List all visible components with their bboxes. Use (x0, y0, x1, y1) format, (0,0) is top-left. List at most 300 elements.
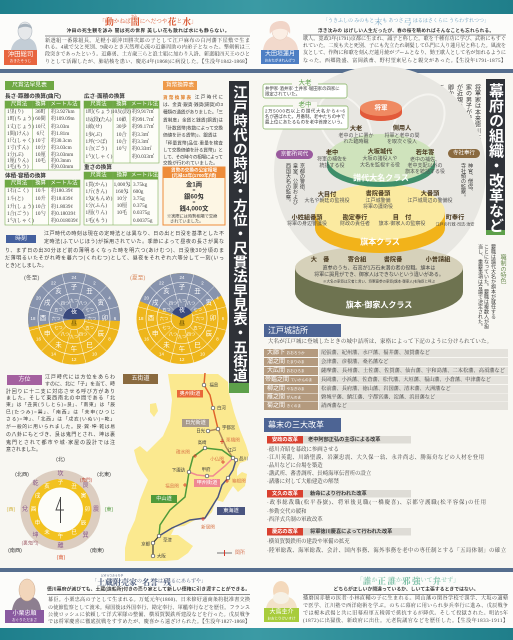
icon: portrait of 大鳥圭介 (264, 581, 299, 622)
callout: 老中: 老中 (298, 100, 312, 108)
chart: 方位盤: 寅 (81, 492, 87, 500)
map: 五街道: 栗橋関 (226, 436, 240, 444)
table: 広さ・面積の換算: 広さ·面積の換算 (84, 92, 125, 100)
chart: 夏至の時刻盤: 戌 (152, 298, 159, 306)
chart: 夏至の時刻盤: 申 (152, 328, 158, 338)
table: 広さ・面積の換算: 1坪(つぼ) (86, 137, 107, 145)
chart: 方位盤: (南東) (90, 546, 104, 554)
pill: 寺社奉行 (448, 148, 480, 158)
tier: 譜代大名クラス: 大名を監視する役 (360, 162, 400, 168)
chart: 夏至の時刻盤: 六つ (160, 315, 168, 322)
ruby: どぞうつきうりや: どぞうつきうりや (101, 574, 123, 578)
text block: 将軍家の説明: が近親の御三家、御三 (456, 83, 463, 146)
chart: 夏至の時刻盤: 辰 (206, 330, 213, 338)
table: 重さの換算: 尺貫法 (90, 171, 107, 179)
chart: 方位盤: (西) (7, 506, 16, 513)
role: 側用人: を取次ぐ役人 (387, 138, 417, 145)
chart: 冬至の時刻盤: 八つ (79, 300, 87, 306)
table: 重さの換算: 0.00375g (133, 218, 153, 224)
chart: 冬至の時刻盤: 10 (92, 352, 97, 356)
biography text: 歌人。寛政3年(1791)京都に生まれ、誠子と称した。歌を千種有功に学び、武術にもすぐ (303, 35, 506, 42)
table: 重さの換算: 換算 (117, 171, 128, 179)
reform: 文久の改革: 勅命により行われた改革 (310, 489, 367, 497)
text block: 方位の説明 (6, 374, 115, 453)
chart: 方位盤: 乾 (32, 479, 39, 487)
callout: 大老: 井伊家·酒井家·土井家·堀田家の四家に (265, 85, 340, 92)
label: 日光街道: 日光街道 (185, 418, 206, 426)
chart: 冬至の時刻盤: 辰 (98, 330, 105, 338)
text block: 貨幣換算の説明: 種類の通貨がありました。「三 (163, 108, 223, 116)
table: 体積・容積の換算: 約0.18039ℓ (51, 209, 76, 217)
table: 広さ・面積の換算: 1合(ごう) (86, 144, 107, 152)
text block: 方位の説明: 鬼門とされて都市や城·家屋の設計では注 (6, 439, 115, 446)
icon: portrait of 大鳥圭介: おおとりけいすけ (268, 616, 296, 620)
chart: 夏至の時刻盤: 四つ (169, 300, 177, 305)
table: 重さの換算: 1毛(もう) (86, 216, 107, 224)
text block: 貨幣換算の説明: して交換価値を計る貨幣)」と (163, 146, 223, 154)
table: 長さ・距離の換算: 約3.927km (51, 107, 74, 115)
role: 大老: 大老 (350, 124, 362, 132)
chart: 方位盤: 午 (58, 532, 64, 540)
tier: 旗本・御家人クラス (295, 246, 463, 318)
heading: 幕末の三大改革: 幕末の三大改革 (268, 420, 324, 430)
chart: 夏至の時刻盤: 午 (179, 344, 186, 353)
table: 体積・容積の換算: 1合(ごう) (7, 209, 29, 217)
table: 広さ・面積の換算: 約0.33㎡ (132, 144, 152, 152)
tier: 旗本クラス: 江戸城警備 (365, 197, 391, 204)
callout: 公定相場: (元禄13年(1700年)頃) (172, 172, 217, 179)
chart: 冬至の時刻盤: 七つ (54, 324, 63, 330)
chart: 冬至の時刻盤: 七つ (85, 306, 94, 312)
chart: 冬至の時刻盤: 20 (36, 296, 41, 300)
chart: 冬至の時刻盤: 巳 (86, 341, 93, 349)
table: 長さ・距離の換算: 尺貫法 (11, 100, 28, 108)
table: 重さの換算: 1,000匁 (114, 180, 131, 188)
icon: portrait of 小栗忠順: 小栗忠順 (12, 609, 37, 617)
chart: 夏至の時刻盤: 12 (180, 357, 185, 362)
text block: 方位の説明: 意されました。 (6, 446, 41, 453)
chart: 冬至の時刻盤: 酉 (40, 314, 47, 322)
chart: 夏至の時刻盤: 六つ (196, 315, 204, 322)
callout: 老中: 最上位にあたるものを老中首座という。 (265, 118, 345, 126)
table: 重さの換算: 160匁 (116, 187, 129, 195)
header panel: 沖田総司 (4, 14, 250, 65)
table: 重さの換算: 600g (133, 189, 144, 195)
table: 長さ・距離の換算: 1厘(りん) (7, 156, 29, 164)
road: 京都大阪 (153, 536, 159, 556)
chart: 方位盤: (鬼門) (80, 476, 93, 484)
reform: 安政の改革: 老中阿部正弘の主導による改革 (308, 435, 380, 443)
tier: 旗本・御家人クラス: 将軍に謁見ができ、御家人はできないという違いがある。 (314, 271, 444, 278)
table: 長さ・距離の換算: 約1.81m (51, 129, 69, 137)
chart: 冬至の時刻盤: 九つ (70, 297, 78, 304)
map: 五街道: 下諏訪 (172, 466, 186, 474)
table: 長さ・距離の換算: 1町(ちょう) (7, 114, 34, 122)
role: 大老 (338, 124, 374, 145)
map: 五街道 (125, 373, 249, 561)
table: 広さ・面積の換算: 1畝(せ) (86, 122, 102, 130)
table: 長さ・距離の換算: 10毛 (35, 156, 46, 164)
reform: 安政の改革: ·徳川斉昭を幕政に参画させる (267, 445, 339, 453)
callout: 大老: 大老 (298, 78, 312, 86)
reform: 安政の改革: ·講武所、蕃書調所、長崎海軍伝習所の設立 (267, 469, 372, 477)
chart: 冬至の時刻盤: 未 (55, 340, 62, 349)
quote translation: 徳川幕府が滅びても、土蔵(造船所)付きの売り家として新しい徳権に引き渡すことができる。 (47, 586, 250, 592)
table: 広さ・面積の換算 (84, 92, 159, 163)
text block: 貨幣換算の説明: 交換が行われていました。 (163, 160, 218, 166)
table: 広さ・面積の換算: 30歩 (116, 122, 127, 130)
biography text: りとして活躍したが、肺結核を患い、慶応4年(1868)に病没した。【生没年1842-1868】 (45, 58, 250, 65)
table: 重さの換算: 10厘 (117, 201, 128, 209)
callout: 老中: 名が選ばれた。月番制。老中たちの中で (265, 113, 346, 120)
table: 広さ・面積の換算: 約991.7㎡ (132, 115, 155, 123)
table: 長さ・距離の換算: 約3.03m (51, 122, 69, 130)
section button: 方位: 方位 (18, 375, 31, 383)
table: 広さ・面積の換算: 約9,917㎡ (132, 107, 155, 115)
quote translation: 浮き沈みの はげしい人生だったが、春の桜を眺めればそんなことも忘れられる。 (318, 27, 494, 34)
chart: 冬至の時刻盤: 九つ (70, 333, 78, 340)
reform: 安政の改革: 安政の改革 (272, 435, 298, 443)
chart: 方位盤: 巽 (82, 532, 89, 539)
label: 東海道 (217, 506, 245, 515)
chart: 方位盤: 震 (93, 506, 99, 513)
chart: 方位盤: (南西) (8, 546, 22, 554)
text block: 職制の特色 (477, 243, 506, 329)
header panel: 大田垣蓮月 (261, 16, 506, 64)
table: 体積・容積の換算: 換算 (35, 179, 46, 187)
map: 五街道: 福島関 (165, 482, 179, 490)
chart: 冬至の時刻盤: 24 (72, 275, 77, 280)
vertical title: 幕府の組織・改革など: 幕府の組織・改革など (487, 83, 504, 233)
chart: 冬至の時刻盤: 六つ (88, 315, 96, 322)
table: 広さ・面積の換算: 10合 (116, 137, 127, 145)
section button: 尺貫法早見表: 尺貫法早見表 (12, 80, 47, 88)
table: 体積・容積の換算: 10勺 (35, 209, 46, 217)
tier: 譜代大名クラス: 老中 (326, 148, 338, 156)
tier: 譜代大名クラス: 老中支配以外の (407, 162, 443, 169)
reform: 慶応の改革: ·横須賀製鉄所の建設や軍備の拡充 (267, 537, 350, 545)
text block: 貨幣換算の説明: 貨制度」金貨と銭貨(銅貨)は (163, 116, 223, 124)
chart: 冬至の時刻盤: 夜 (71, 308, 77, 316)
table: 体積・容積の換算: 10合 (35, 202, 46, 210)
reform: 慶応の改革: 将軍徳川慶喜によって行われた改革 (310, 527, 392, 535)
callout: 公定相場: 金1両 (186, 180, 203, 188)
quote translation: 沖田の死生観を詠み 闇は死の世界 美しい花も散れば水にも静らない。 (66, 27, 230, 34)
tier: 譜代大名クラス (317, 134, 445, 187)
table: 体積・容積の換算: 1斗(と) (7, 194, 24, 202)
reform: 文久の改革: ·政事総裁職(松平春嶽)、将軍後見職(一橋慶喜)、京都守護職(松平容保)の任用 (267, 498, 486, 506)
chart: 方位盤: 卯 (85, 505, 91, 513)
tier: 旗本クラス: 大名や朝廷の監視役 (304, 197, 350, 204)
table: 長さ・距離の換算: 換算 (35, 100, 46, 108)
table: 江戸城詰所: 尾張藩、紀州藩、水戸藩、福井藩、加賀藩など (321, 348, 430, 356)
chart: 夏至の時刻盤: 10 (200, 352, 205, 356)
callout: 公定相場: 銀60匁 (184, 192, 205, 200)
role: 大老: 老中の上に置か (338, 132, 374, 139)
biography text: (1872)に出獄後、新政府に出仕。元老院議官などを歴任した。【生没年1833-1911】 (303, 617, 508, 624)
quote heading: 「うきふしの みのもと末も あつさ弓 はるはさくらに うちわすれつつ」 (323, 16, 489, 26)
role: 側用人: 側用人 (393, 124, 412, 132)
reform: 安政の改革 (267, 435, 484, 485)
tier: 旗本クラス: 大目付 (318, 190, 336, 198)
text block: 職制の特色: 当し、重要事項は合議で決定された。 (477, 243, 483, 329)
chart: 夏至の時刻盤: 寅 (206, 298, 213, 306)
label: 奥州街道: 奥州街道 (180, 389, 200, 397)
table: 江戸城詰所: 柳之間 やなぎのま (267, 384, 305, 392)
tier: 譜代大名クラス: 大坂の諸役人や (362, 155, 398, 162)
map: 五街道: 江戸 (228, 446, 237, 454)
table: 長さ・距離の換算: 1寸(すん) (7, 143, 29, 151)
text block: 貨幣換算の説明: は、金貨·銀貨·銭貨(銅貨)の3 (163, 101, 223, 108)
biography text: れていた。二度も夫と死別、子にも先立たれ剃髪して仏門に入り蓮月尼と称した。風流を (303, 42, 506, 49)
text block: 方位の説明: 巳(たつみ)=巽」、「南西」は「未申(ひつじ (6, 408, 115, 416)
table: 江戸城詰所: 溜之間 たまりのま (267, 357, 305, 365)
text block: 貨幣換算の説明 (163, 94, 223, 166)
biography text: 播磨国赤穂の医者·小林直輔の子に生まれる。岡山藩の閑谷学校で漢学、大坂の適塾 (303, 594, 508, 602)
chart: 夏至の時刻盤: 4 (216, 296, 219, 300)
table: 体積・容積の換算: 10斗 (35, 186, 46, 194)
table: 江戸城詰所: 大廊下 おおろうか (267, 348, 305, 356)
tier: 譜代大名クラス: 若年寄 (416, 148, 434, 156)
chart: 方位盤: 酉 (31, 506, 37, 513)
map: 五街道: 白河 (217, 404, 226, 412)
text block: 時刻の説明: だ薄明るいたそがれ時を暮六つ(くれむつ)として、昼夜をそれぞれ六等分して一刻(いっ (5, 254, 224, 262)
icon: portrait of 沖田総司: おきたそうじ (10, 58, 32, 63)
text block: 時刻の説明: 定時法(ふていじほう)が採用されていた。季節によって昼夜の長さが異な (44, 238, 224, 245)
chart: 方位盤: 未 (44, 528, 50, 536)
tier: 旗本クラス: 江戸の行政·司法·治安 (436, 220, 474, 226)
tier: 旗本クラス: 旗本クラス (360, 236, 400, 246)
map: 五街道: 甲府 (202, 467, 211, 473)
org chart: 幕府の組織 (274, 66, 486, 318)
table: 江戸城詰所: 薩摩藩、長州藩、土佐藩、佐賀藩、仙台藩、宇和島藩、二本松藩、高須藩など (321, 366, 505, 374)
chart: 夏至の時刻盤: 巳 (194, 341, 201, 349)
table: 広さ・面積の換算: 10勺 (116, 144, 127, 152)
text block: 方位の説明: 東」は「丑寅(うしとら)=艮」、「南東」は「辰 (6, 401, 115, 408)
land mass (125, 374, 249, 561)
road: 甲州街道 (189, 458, 233, 476)
map: 五街道: 新居関 (201, 524, 215, 530)
chart: 冬至の時刻盤: 八つ (61, 332, 69, 338)
label: 日光街道 (182, 418, 209, 427)
chart: 冬至の時刻盤: 寅 (98, 298, 105, 306)
text block: 詰所の説明: 大名が江戸城に登城したときの城中詰所は、家格によって下記のように分けられていた。 (268, 337, 492, 345)
chart: 方位盤: 坤 (32, 531, 39, 539)
callout: 老中 (263, 100, 348, 129)
chart: 冬至の時刻盤: 子 (71, 283, 78, 291)
quote heading: 「動かねば闇にへだつや花と水」 (99, 16, 197, 27)
table: 長さ・距離の換算: 1分(ぶ) (7, 150, 24, 158)
text block: 方位の説明: ました。そして東西南北の中間である「北 (6, 394, 115, 402)
text block: 寺社奉行の説明 (460, 162, 473, 199)
map: 五街道: 福島 (210, 382, 219, 388)
tier: 旗本・御家人クラス: 大 番 (311, 256, 330, 264)
chart: 方位盤: 離 (57, 542, 64, 550)
label: 中山道 (151, 494, 177, 503)
quote heading: 「誰か正 誰か邪 強いて弁せず」 (357, 576, 459, 586)
chart: 冬至の時刻盤: 14 (51, 352, 56, 356)
chart: 夏至の時刻盤: 酉 (148, 314, 155, 322)
legend: 関所 (217, 549, 245, 556)
chart: 夏至の時刻盤: 20 (144, 296, 149, 300)
chart: 夏至の時刻盤: 五つ (162, 307, 171, 312)
text block: 貨幣換算の説明: して、その時々の相場によって (163, 154, 223, 160)
tier: 譜代大名クラス: 旗本を統括する役 (405, 168, 445, 175)
reform: 慶応の改革: ·陸軍総裁、海軍総裁、会計、国内事務、海外事務を老中の専任制とする「五局体制」の確立 (267, 546, 507, 554)
map: 五街道: 京都 (141, 542, 151, 548)
tier: 旗本クラス: 勘定奉行 (343, 214, 367, 222)
tier: 旗本・御家人クラス: ※大名の家臣は又者と言い、将軍直参の家臣(旗本·御家人)を陪臣と呼ぶ (323, 278, 435, 284)
icon: portrait of 大田垣蓮月: 大田垣蓮月 (265, 50, 295, 58)
chart: 方位盤: 亥 (44, 483, 50, 490)
table: 長さ・距離の換算: 約0.3mm (51, 156, 71, 164)
text block: 時刻の説明 (5, 230, 224, 269)
map: 五街道: 大阪 (157, 552, 166, 560)
chart: 夏至の時刻盤: 8 (216, 336, 219, 342)
chart: 夏至の時刻盤: 五つ (193, 325, 202, 330)
chart: 夏至の時刻盤: 七つ (193, 306, 202, 312)
callout: 老中: 2万5000石以上の譜代大名から4~6 (265, 108, 346, 114)
text block: 時刻の説明: 江戸時代の時刻は現在の定時法とは異なり、日の出と日没を基準とした不 (44, 230, 224, 237)
role: 側用人: 将軍と老中の間 (384, 132, 420, 139)
table: 長さ・距離の換算: 約0.03mm (51, 162, 73, 170)
table: 江戸城詰所: 松前藩、長府藩、徳山藩、岩国藩、清末藩、大洲藩など (321, 384, 451, 392)
chart: 冬至の時刻盤: 五つ (54, 307, 63, 312)
chart: 方位盤: 丑 (71, 483, 77, 490)
chart: 冬至の時刻盤: 16 (36, 336, 41, 342)
text block: 方位の説明: の八卦にもとづき、艮は鬼門とされ、坤は裏 (6, 431, 115, 438)
text block: 職制の特色: ことになっていた。要職は複数人が担 (483, 244, 489, 329)
table: 広さ・面積の換算: メートル法 (131, 100, 159, 108)
chart: 夏至の時刻盤: 2 (201, 280, 204, 286)
chart: 夏至の時刻盤: 九つ (178, 333, 186, 340)
table: 体積・容積の換算: 約18.039ℓ (51, 194, 73, 202)
chart: 夏至の時刻盤 (130, 273, 228, 364)
tier: 旗本・御家人クラス: 旗本·御家人クラス (346, 300, 412, 310)
table: 重さの換算: 1分(ふん) (86, 201, 107, 209)
icon: portrait of 小栗忠順: おぐりただまさ (12, 617, 37, 622)
table: 重さの換算: 重さの換算 (84, 163, 112, 171)
chart: 夏至の時刻盤: 18 (139, 316, 144, 321)
map: 五街道: 高崎 (198, 439, 207, 446)
table: 重さの換算: 1斤(きん) (86, 187, 107, 195)
tier: 旗本・御家人クラス: 直参のうち、石高が1万石未満の者の役職。旗本は (323, 264, 435, 272)
table: 体積・容積の換算: 1升(しょう) (7, 202, 34, 210)
table: 広さ・面積の換算: 1勺(しゃく) (86, 152, 113, 160)
table: 体積・容積の換算: メートル法 (51, 179, 78, 187)
table: 江戸城詰所: 会津藩、彦根藩、桑名藩など (321, 357, 388, 365)
chart: 冬至の時刻盤: 8 (108, 336, 111, 342)
table: 江戸城詰所: 磐城平藩、鯖江藩、宇都宮藩、淀藩、浜田藩など (321, 392, 435, 400)
text block: 方位の説明: 計回りに十二支に対応させる呼び方があり (6, 388, 115, 395)
table: 長さ・距離の換算: 36町 (35, 107, 46, 115)
biography text: では将軍慶喜に徹底抗戦をすすめたが、慶喜から遠ざけられた。【生没年1827-1868】 (48, 618, 250, 625)
table: 体積・容積の換算: 約1.8039ℓ (51, 202, 73, 210)
quote translation: どちらが正しいか間違っているか、しいて主張するときではない。 (334, 586, 478, 592)
table: 広さ・面積の換算: 1町(ちょう) (86, 107, 113, 115)
ruby: やみ: やみ (131, 14, 137, 18)
chart: 夏至の時刻盤: 未 (163, 340, 170, 349)
chart: 冬至の時刻盤: 申 (44, 328, 50, 338)
tier: 旗本クラス: 小姓組番頭 (292, 214, 323, 222)
table: 長さ・距離の換算: 10分 (35, 143, 46, 151)
table: 長さ・距離の換算 (5, 92, 80, 170)
chart: 夏至の時刻盤: 四つ (187, 332, 195, 337)
chart: 方位盤: 艮 (82, 482, 89, 489)
map: 五街道: 碓氷関 (176, 448, 190, 456)
text block: 将軍家の説明: 卿から養子を迎える (446, 83, 454, 140)
table: 江戸城詰所: 雁之間 がんのま (267, 392, 301, 400)
chart: 冬至の時刻盤: 戌 (44, 298, 51, 306)
table: 長さ・距離の換算: 約3.03cm (51, 143, 72, 151)
table: 重さの換算: 0.375g (133, 203, 148, 209)
table: 体積・容積の換算: 約180.39ℓ (51, 186, 73, 194)
text block: 職制の特色: 職制の特色 (499, 253, 506, 284)
chart: 夏至の時刻盤: 八つ (169, 332, 177, 338)
map: 五街道: 小仏関 (210, 456, 224, 462)
table: 重さの換算: 3.75kg (133, 182, 148, 188)
table: 長さ・距離の換算: 1間(けん) (7, 129, 29, 137)
tier: 旗本クラス: 大番頭 (421, 190, 440, 198)
map: 五街道: 箱根関 (232, 478, 246, 484)
callout: 公定相場: されていました。 (170, 218, 203, 224)
chart: 方位盤: 辰 (81, 520, 87, 526)
tier: 譜代大名クラス: 将軍の補佐を (317, 156, 347, 162)
road: 奥州街道 (204, 373, 218, 429)
chart: 夏至の時刻盤: 22 (159, 280, 164, 286)
reform: 安政の改革: ·諸藩に対して大船建造の解禁 (267, 477, 339, 485)
chart: 夏至の時刻盤: 九つ (178, 297, 186, 304)
map: 五街道: 日光 (196, 428, 206, 434)
table: 江戸城詰所 (264, 348, 508, 410)
section button: 貨幣換算表: 貨幣換算表 (166, 80, 194, 88)
map: 五街道: 草津 (163, 536, 172, 544)
chart: 夏至の時刻盤: 16 (144, 336, 149, 342)
callout: 公定相場: = (193, 188, 196, 194)
heading: 江戸城詰所: 江戸城詰所 (268, 325, 308, 335)
chart: 方位盤: 申 (35, 518, 40, 526)
section button: 方位 (7, 375, 42, 385)
biography text: 段突きであったという。近藤勇、土方歳三らと浪士組に加わり入洛、新選組四天王のひと (45, 50, 250, 58)
chart: 方位盤: 兌 (22, 506, 28, 513)
label: 東海道: 東海道 (223, 506, 239, 514)
chart: 夏至の時刻盤: 丑 (194, 287, 201, 295)
icon: portrait of 小栗忠順 (5, 579, 44, 623)
chart: 方位盤: 戌 (35, 492, 41, 500)
chart: 夏至の時刻盤: 亥 (163, 287, 170, 295)
text block: 方位の説明: 江戸時代には方位をあらわ (45, 374, 115, 380)
barrier marks (183, 439, 229, 521)
icon: portrait of 大田垣蓮月 (261, 21, 299, 64)
role: 大老: れた臨時職 (343, 138, 369, 145)
chart: 冬至の時刻盤: 12 (72, 357, 77, 362)
legend: 関所: 関所 (235, 549, 245, 556)
road: 中山道 (159, 448, 233, 536)
chart: 方位盤: 巳 (71, 529, 77, 536)
table: 体積・容積の換算: 1石(こく) (7, 187, 29, 194)
label: 甲州街道: 甲州街道 (197, 478, 217, 486)
chart: 夏至の時刻盤: 夜 (179, 306, 185, 314)
chart: 夏至の時刻盤: 昼 (179, 320, 185, 328)
table: 江戸城詰所: 大広間 おおひろま (267, 366, 305, 374)
table: 長さ・距離の換算: 6尺 (37, 129, 44, 137)
reform: 文久の改革: ·西洋式兵制の軍政改革 (267, 515, 323, 523)
text block: 貨幣換算の説明: 価値を計る貨幣)」、銀貨は (163, 132, 217, 138)
text block: 貨幣換算の説明: 「計数貨幣(枚数によって交換 (163, 124, 223, 132)
table: 長さ・距離の換算: 長さ·距離の換算(曲尺) (5, 92, 61, 100)
chart: 冬至の時刻盤: 五つ (85, 325, 94, 330)
chart: 方位盤: (南) (57, 553, 66, 561)
